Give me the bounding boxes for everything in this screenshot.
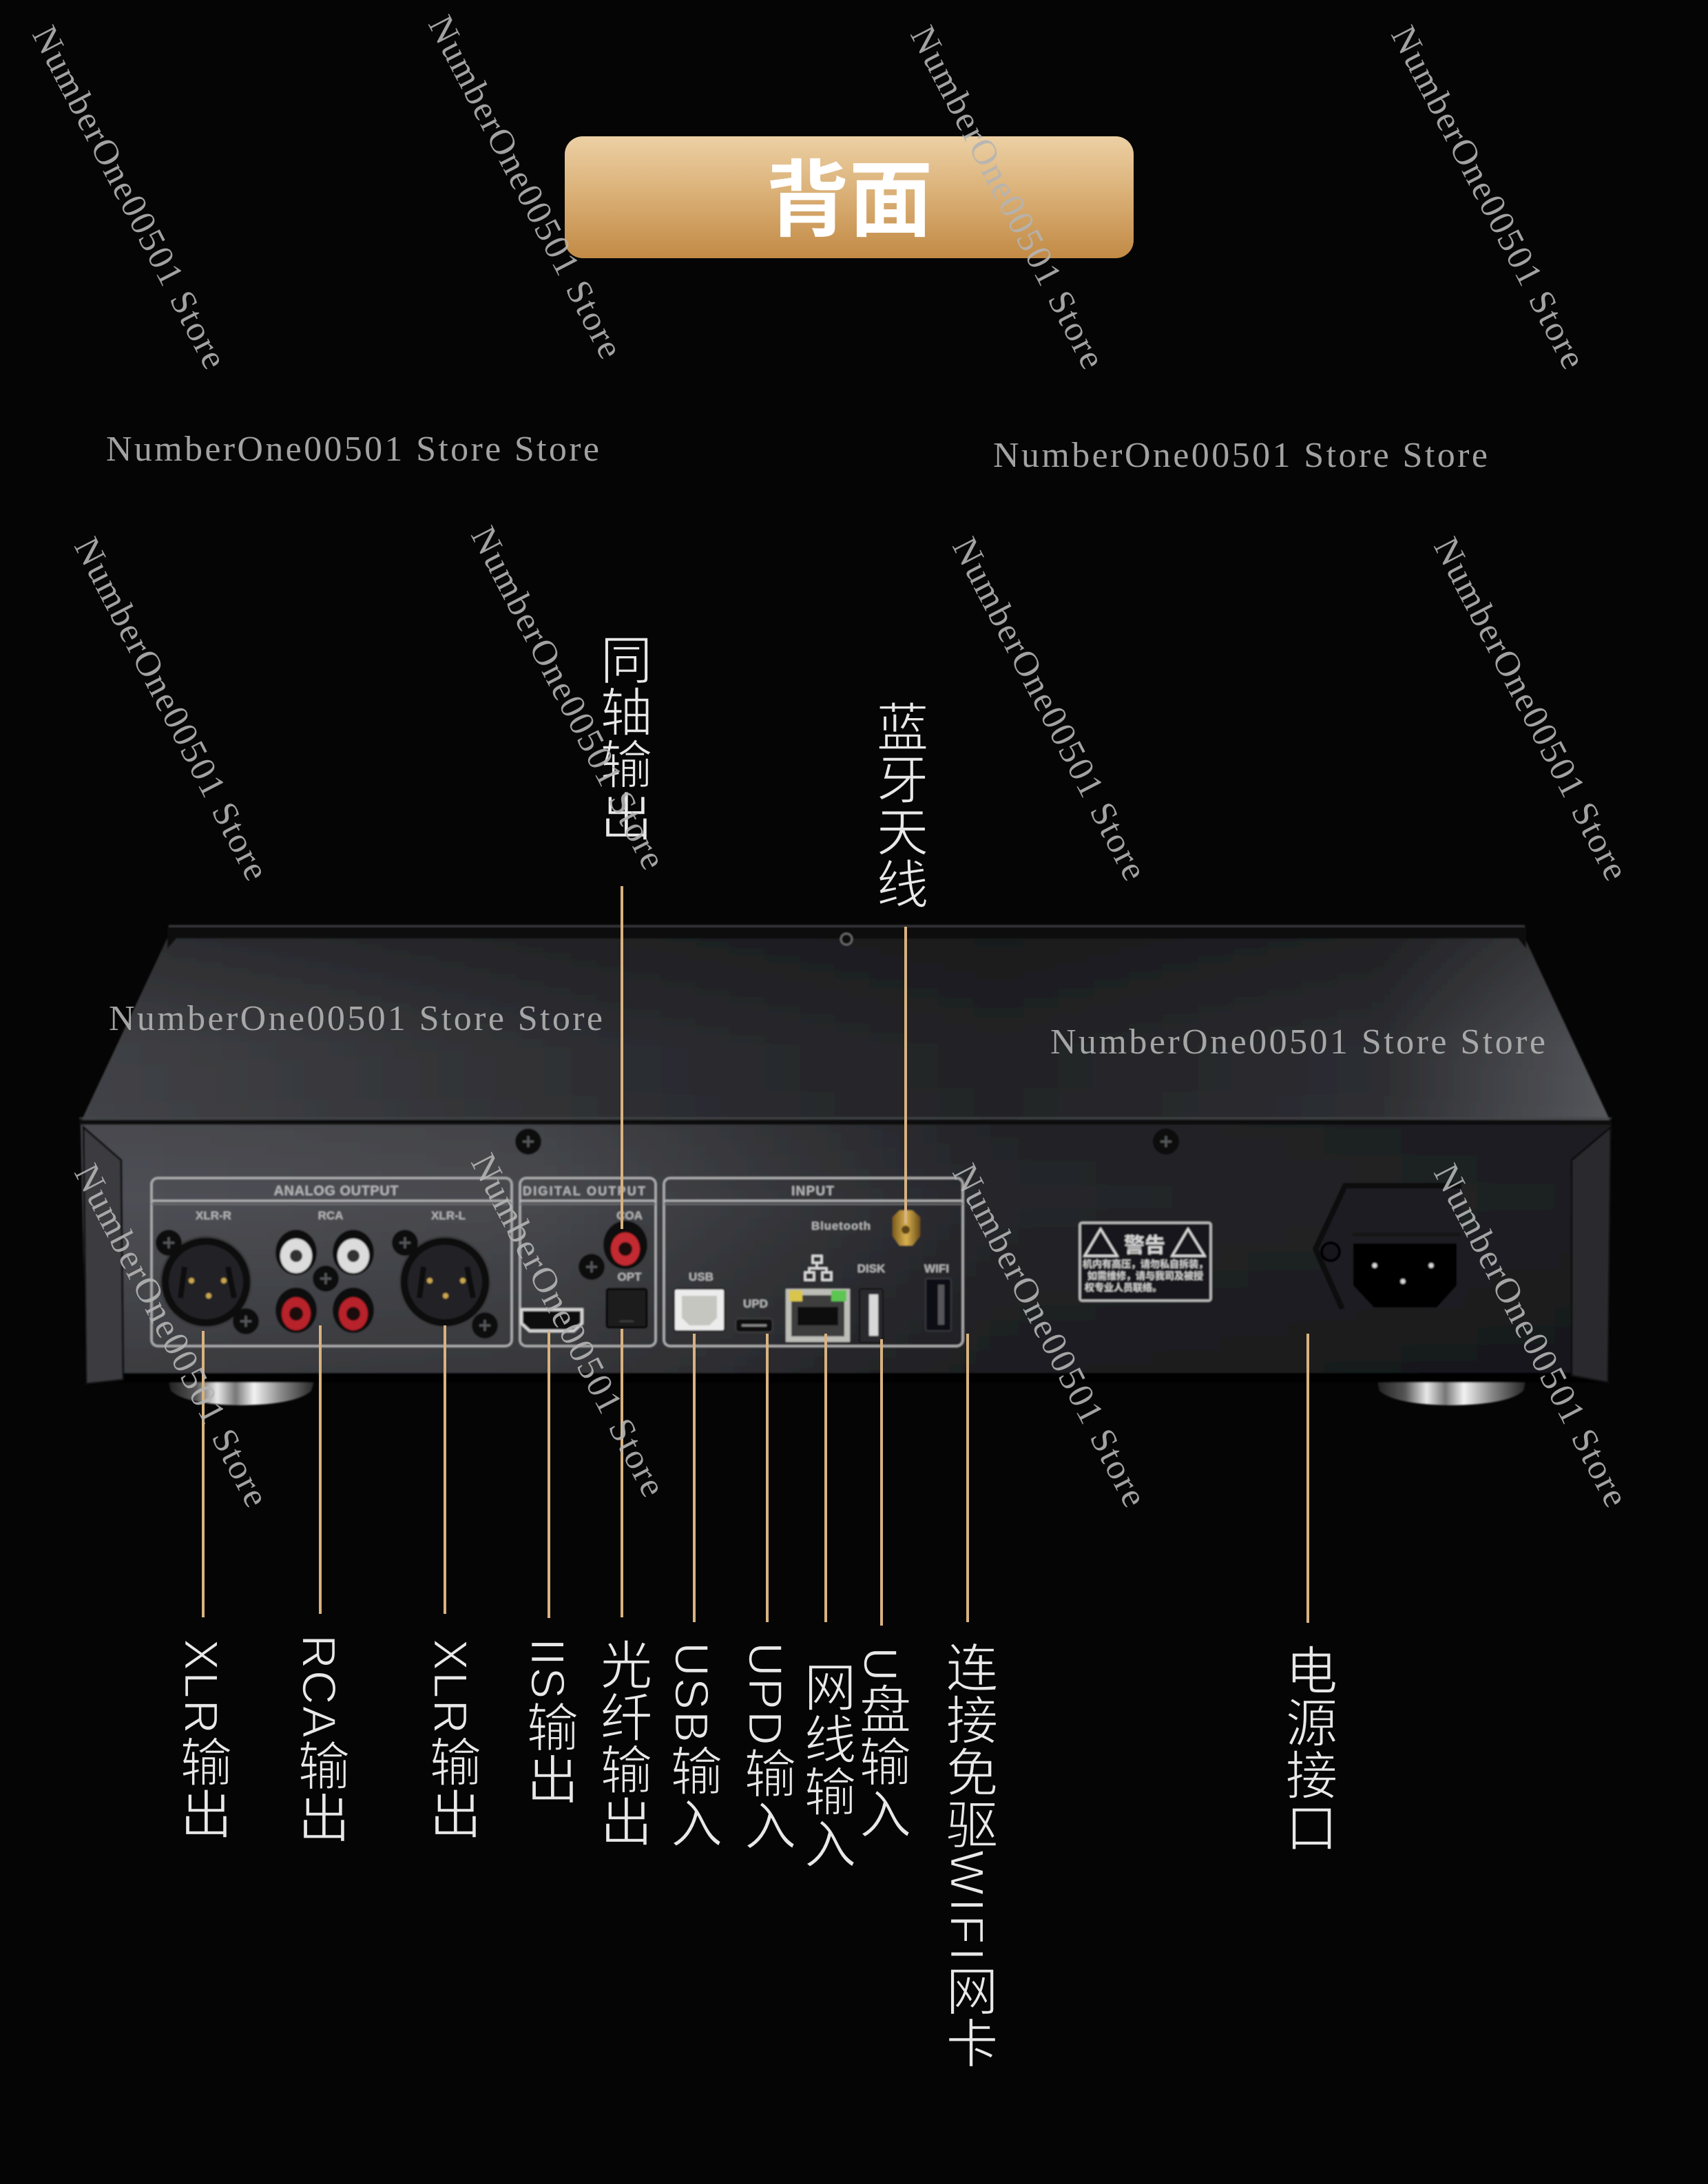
leader line: UPD [766,1334,769,1622]
panel: analog output [152,1178,512,1346]
label: power socket: 电源接口 [1277,1644,1336,1853]
leader line: optical [621,1329,623,1617]
watermarks: NumberOne00501 Store [463,1148,673,1503]
watermarks: NumberOne00501 Store Store [106,430,599,469]
bluetooth antenna connector [893,1210,920,1246]
leader line: XLR-R [202,1331,205,1617]
title text: 背面 [766,154,933,247]
label: optical output: 光纤输出 [592,1638,652,1847]
network icon [805,1256,831,1280]
leader line: U disk [880,1339,883,1626]
watermarks: NumberOne00501 Store [902,20,1112,375]
USB-A (WIFI) port [926,1279,951,1331]
watermarks: NumberOne00501 Store Store [993,436,1488,475]
leader line: RCA [319,1325,322,1614]
leader line: IIS [548,1331,550,1618]
panel: analog output: XLR-L [431,1209,466,1222]
XLR-L connector [392,1230,498,1338]
power socket [1315,1186,1467,1309]
panel: digital output [520,1178,656,1346]
panel: analog output: ANALOG OUTPUT [274,1184,398,1199]
USB-C (UPD) port [736,1319,773,1332]
warning label [1080,1223,1211,1301]
watermarks: NumberOne00501 Store [1383,20,1593,375]
watermarks: NumberOne00501 Store [24,20,234,375]
RCA jacks [275,1230,374,1333]
watermarks: NumberOne00501 Store Store [1050,1022,1545,1062]
RJ45 network port [786,1289,850,1342]
label: USB input: USB 输入 [663,1642,720,1849]
leader line: USB [693,1334,696,1622]
label: UPD input: UPD 输入 [736,1642,795,1851]
warning label: 机内有高压，请勿私自拆装， [1083,1259,1208,1270]
panel: input: UPD [743,1297,768,1310]
label: network input: 网线输入 [796,1660,854,1869]
watermarks: NumberOne00501 Store [420,10,630,365]
optical port [607,1289,647,1327]
title button [565,136,1134,258]
panel: input: WIFI [924,1262,949,1275]
label: driver-free WIFI card: 连接免驱 WIFI 网卡 [938,1641,997,2069]
top screw hole [841,934,852,945]
watermarks: NumberOne00501 Store [463,521,673,876]
left side panel [83,1127,123,1384]
warning triangles [1085,1229,1205,1256]
watermarks: NumberOne00501 Store [1426,1158,1636,1513]
warning label: 权专业人员联络。 [1085,1282,1162,1293]
panel: analog output: RCA [318,1209,343,1222]
leader line: XLR-L [444,1325,446,1614]
label: coaxial output: 同轴输出 [592,633,650,842]
panel: digital output: OPT [618,1270,642,1283]
leader line: power [1306,1334,1309,1623]
watermarks: NumberOne00501 Store [66,1158,276,1513]
front face [79,1118,1612,1383]
panel: input [664,1178,963,1346]
label: IIS output: IIS 输出 [518,1638,577,1805]
panel: input: USB [689,1270,714,1283]
label: RCA output: RCA 输出 [289,1635,348,1844]
watermarks [24,10,1636,1513]
label: XLR output R: XLR 输出 [172,1639,230,1840]
watermarks: NumberOne00501 Store [66,532,276,887]
watermarks: NumberOne00501 Store Store [109,999,603,1038]
watermarks: NumberOne00501 Store [1426,532,1636,887]
label: XLR output L: XLR 输出 [421,1639,479,1840]
panel: input: INPUT [791,1184,834,1199]
leader line: WIFI [966,1334,969,1622]
leader line: coaxial output [621,886,623,1229]
label: bluetooth antenna: 蓝牙天线 [868,700,927,910]
leader line: network [824,1334,827,1622]
rubber feet [165,1367,1529,1405]
right side panel [1572,1127,1611,1383]
watermarks: NumberOne00501 Store [944,532,1154,887]
leader line: bluetooth antenna [904,927,907,1224]
panel: digital output: COA [616,1209,643,1222]
panel: input: Bluetooth [811,1219,871,1232]
label: U disk input: U 盘输入 [851,1647,909,1840]
panel: analog output: XLR-R [196,1209,231,1222]
coaxial jack [579,1221,647,1280]
USB-B port [674,1289,725,1331]
warning label: 警告 [1124,1235,1165,1257]
panel: input: DISK [857,1262,886,1275]
device: rear view [79,926,1612,1405]
top screws [515,1128,1179,1155]
watermarks: NumberOne00501 Store [944,1158,1154,1513]
XLR-R connector [156,1230,259,1334]
panel: digital output: DIGITAL OUTPUT [523,1184,645,1198]
top cover [81,926,1611,1122]
USB-A (DISK) port [860,1289,883,1343]
warning label: 如需维修，请与我司及被授 [1087,1270,1203,1281]
HDMI (IIS) port [521,1310,582,1331]
